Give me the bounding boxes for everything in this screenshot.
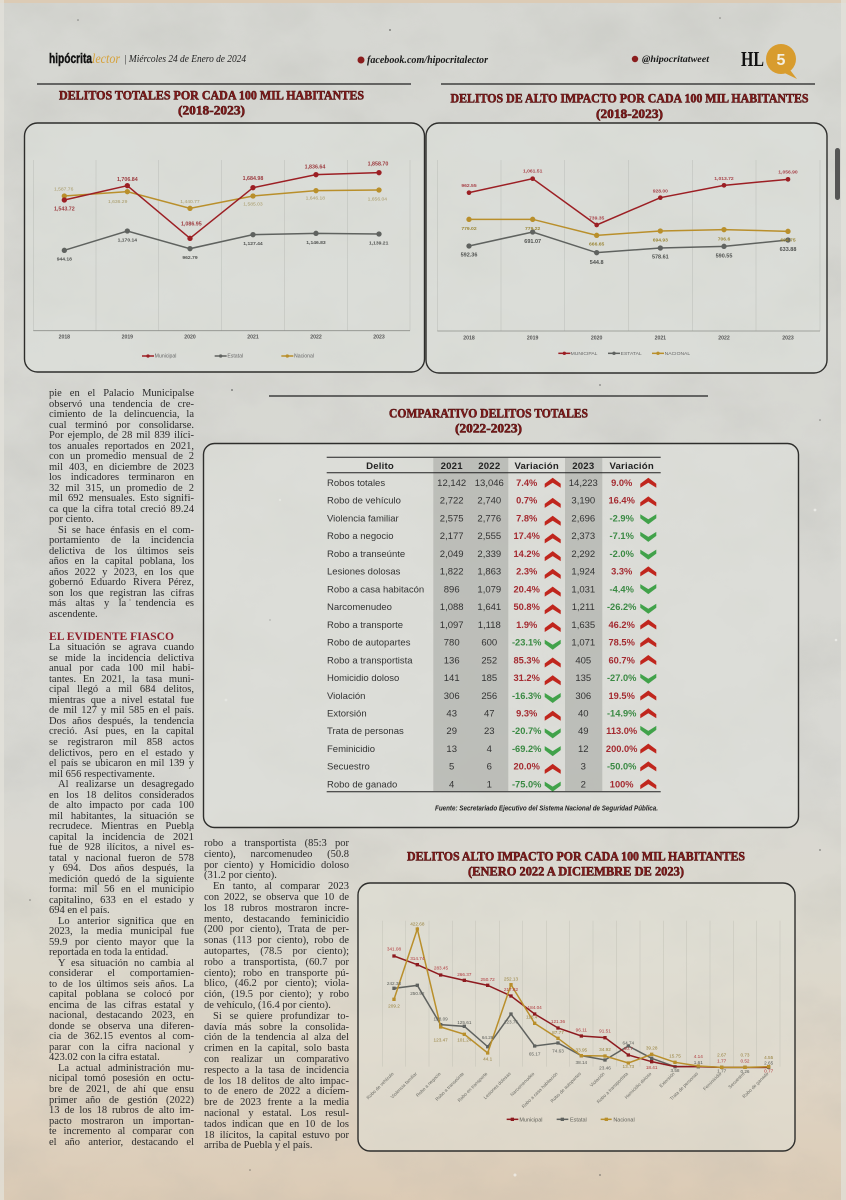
data labels: 1,706.84 <box>117 177 138 183</box>
table rows: 7.4% <box>516 478 538 488</box>
table rows: Robo de autopartes <box>327 638 411 649</box>
data labels: nacional: 209.2 <box>388 1003 400 1008</box>
text column 2 <box>204 839 349 1151</box>
data labels: nacional: 33.95 <box>576 1048 588 1053</box>
year axis: 2018 <box>463 336 475 342</box>
data labels: nacional: 118.4 <box>526 1014 538 1019</box>
legend: Nacional <box>294 354 314 360</box>
table rows: 13,046 <box>475 478 504 489</box>
data labels <box>461 169 798 221</box>
data labels: municipal: 91.51 <box>599 1029 611 1034</box>
table rows: Feminicidio <box>327 744 375 755</box>
panel: line chart delitos de alto impacto: 544.8 <box>590 260 604 266</box>
data labels: municipal: 0.77 <box>764 1068 774 1073</box>
data labels: nacional: 34.92 <box>599 1047 611 1052</box>
table rows: 9.3% <box>516 709 538 719</box>
data labels <box>54 162 388 227</box>
category axis labels: Secuestro <box>727 1071 746 1090</box>
table rows: 23 <box>484 726 495 737</box>
title: delitos de alto impacto: (2018-2023) <box>596 107 663 121</box>
data labels: nacional: 87.77 <box>552 1030 564 1035</box>
year axis <box>59 335 385 341</box>
legend: Estatal <box>227 354 243 360</box>
panel: line chart delitos de alto impacto: 779.22 <box>525 226 541 232</box>
scrollbar mark <box>835 148 840 200</box>
table rows: 12,142 <box>437 478 466 489</box>
table rows: 9.0% <box>611 478 633 488</box>
table rows: 2,696 <box>571 514 595 525</box>
panel: line chart delitos de alto impacto: 691.07 <box>524 239 541 245</box>
data labels: 1,684.98 <box>243 176 263 182</box>
table rows: 2,373 <box>571 531 595 542</box>
table rows: Robo de vehículo <box>327 496 401 507</box>
data labels: municipal: 217.82 <box>504 987 519 992</box>
series: municipal <box>467 176 790 227</box>
table rows: 2,722 <box>440 496 464 507</box>
data labels: estatal: 0.26 <box>740 1069 750 1074</box>
panel: line chart delitos de alto impacto: 664.75 <box>780 238 796 244</box>
series: estatal <box>62 228 382 253</box>
title: comparativo delitos totales: COMPARATIVO DELITOS TOTALES <box>389 406 588 420</box>
table rows: -75.0% <box>512 779 542 789</box>
data labels: 1,061.51 <box>523 169 543 175</box>
table rows: 306 <box>444 691 460 702</box>
title: comparativo delitos totales: (2022-2023) <box>455 422 522 436</box>
table rows: Violación <box>327 691 365 702</box>
table rows: 1,079 <box>477 584 501 595</box>
table rows: Robo a negocio <box>327 531 394 542</box>
legend <box>558 351 690 357</box>
table rows <box>327 478 656 792</box>
HL page badge: HL <box>741 47 764 71</box>
title: delitos totales: DELITOS TOTALES POR CADA 100 MIL HABITANTES <box>59 88 364 102</box>
panel: line chart delitos de alto impacto: 779.02 <box>461 226 477 232</box>
category axis labels: Robo en transporte <box>457 1071 489 1103</box>
table rows: 17.4% <box>514 531 541 541</box>
panel: line chart delitos totales: 1,646.18 <box>306 196 325 202</box>
table header: 2021 <box>441 461 463 472</box>
series: estatal <box>466 229 791 255</box>
table header <box>327 457 661 473</box>
table rows: 60.7% <box>609 655 636 665</box>
table rows: 141 <box>444 673 460 684</box>
data labels: municipal: 283.45 <box>434 966 449 971</box>
panel: line chart delitos totales: 1,146.83 <box>306 240 326 246</box>
table rows: 4 <box>449 779 454 790</box>
table rows: Secuestro <box>327 762 370 773</box>
table rows: -2.9% <box>610 514 635 524</box>
panel: line chart delitos de alto impacto: 694.93 <box>653 238 668 244</box>
data labels: 962.55 <box>461 183 477 189</box>
table rows: 31.2% <box>514 673 541 683</box>
data labels: 1,056.90 <box>778 169 798 175</box>
table rows: Violencia familiar <box>327 514 399 525</box>
panel: line chart delitos totales: 1,170.14 <box>118 238 137 244</box>
year axis: 2020 <box>184 335 196 341</box>
table rows: -50.0% <box>607 762 637 772</box>
table rows: -26.2% <box>607 602 637 612</box>
panel: line chart alto impacto por delito <box>358 883 795 1151</box>
title: delitos de alto impacto: DELITOS DE ALTO IMPACTO POR CADA 100 MIL HABITANTES <box>450 92 809 106</box>
table rows: 780 <box>444 638 460 649</box>
table rows: 50.8% <box>514 602 541 612</box>
twitter handle: @hipocritatweet <box>642 55 709 65</box>
year axis: 2021 <box>247 335 259 341</box>
series: estatal <box>392 984 770 1069</box>
data labels: nacional: 101.24 <box>457 1038 472 1043</box>
table rows: 2,776 <box>477 514 501 525</box>
table header: 2022 <box>478 461 500 472</box>
data labels: nacional: 4.55 <box>764 1055 774 1060</box>
panel: line chart delitos totales: 1,139.21 <box>369 240 389 246</box>
panel: line chart delitos de alto impacto <box>426 123 827 373</box>
series: municipal <box>392 954 769 1067</box>
table rows: -4.4% <box>610 584 635 594</box>
table rows: 1,641 <box>477 602 501 613</box>
logo: hipócrita lector: hipócrita <box>49 50 92 66</box>
table rows: 136 <box>444 655 460 666</box>
table rows: 6 <box>487 762 492 773</box>
data labels: 928.00 <box>653 188 668 194</box>
table rows: -69.2% <box>512 744 542 754</box>
panel: line chart delitos totales: 1,440.77 <box>180 199 200 205</box>
data labels: nacional: 15.75 <box>669 1053 681 1058</box>
table rows: 1,097 <box>440 620 464 631</box>
table rows: 185 <box>481 673 497 684</box>
table rows: 29 <box>446 726 457 737</box>
panel: line chart delitos totales: 1,587.76 <box>54 187 74 193</box>
table header: Variación <box>609 461 654 472</box>
data labels: estatal: 1.77 <box>717 1068 727 1073</box>
category axis labels: Robo de ganado <box>741 1071 770 1099</box>
category axis labels: Robo a transeúnte <box>434 1071 465 1102</box>
legend <box>507 1117 635 1123</box>
table rows: 40 <box>578 709 589 720</box>
HL page badge <box>741 44 797 79</box>
date: | Miércoles 24 de Enero de 2024 <box>124 54 247 65</box>
table rows: 1.9% <box>516 620 538 630</box>
table rows: Lesiones dolosas <box>327 567 401 578</box>
data labels: nacional: 39.28 <box>646 1046 658 1051</box>
table rows: 2 <box>581 779 586 790</box>
data labels: municipal: 60.7 <box>624 1046 633 1051</box>
table rows: -20.7% <box>512 726 542 736</box>
panel: line chart delitos de alto impacto: 578.61 <box>652 255 669 261</box>
data labels: estatal <box>387 981 774 1074</box>
table rows: 600 <box>481 638 497 649</box>
source note: Fuente: Secretariado Ejecutivo del Sistema Nacional de Seguridad Pública. <box>435 806 658 812</box>
table rows: 306 <box>575 691 591 702</box>
data labels: municipal: 121.36 <box>551 1019 566 1024</box>
data labels: nacional: 0.73 <box>740 1053 750 1058</box>
data labels: estatal: 23.46 <box>599 1065 611 1070</box>
panel: line chart delitos de alto impacto: 706.6 <box>718 236 730 242</box>
text column 1 <box>49 389 194 1148</box>
data labels: municipal: 1.77 <box>717 1058 727 1063</box>
table rows: -2.0% <box>610 549 635 559</box>
legend: MUNICIPAL <box>571 351 598 357</box>
data labels: 1,858.70 <box>368 162 388 168</box>
table rows: 4 <box>487 744 492 755</box>
panel: line chart delitos de alto impacto: 633.88 <box>780 247 796 253</box>
table rows: Robos totales <box>327 478 385 489</box>
table rows: 1,088 <box>440 602 464 613</box>
table rows: 896 <box>444 584 460 595</box>
table rows: -27.0% <box>607 673 637 683</box>
data labels: municipal: 314.74 <box>410 956 425 961</box>
panel: line chart delitos totales: 1,636.29 <box>108 199 128 205</box>
data labels: nacional: 422.68 <box>410 922 425 927</box>
category axis labels: Violación <box>589 1071 606 1088</box>
table header: Delito <box>366 461 394 472</box>
panel: line chart delitos de alto impacto: 590.55 <box>716 253 732 259</box>
table rows: 3.3% <box>611 567 633 577</box>
table rows: 1,863 <box>477 567 501 578</box>
data labels: estatal: 1.61 <box>694 1060 703 1065</box>
data labels: municipal: 4.14 <box>694 1054 703 1059</box>
year axis: 2022 <box>310 335 322 341</box>
table rows: -23.1% <box>512 638 542 648</box>
table rows: 2,555 <box>477 531 501 542</box>
year axis: 2022 <box>718 336 730 342</box>
data labels: estatal: 64.28 <box>482 1035 494 1040</box>
data labels: estatal: 74.63 <box>552 1048 564 1053</box>
data labels: nacional: 13.73 <box>623 1064 635 1069</box>
panel: tabla comparativa <box>204 444 798 828</box>
title: delitos alto impacto 2022-2023: DELITOS ALTO IMPACTO POR CADA 100 MIL HABITANTES <box>407 850 745 864</box>
table rows: 1,071 <box>571 638 595 649</box>
panel: line chart delitos totales <box>24 123 424 372</box>
legend: Municipal <box>519 1117 543 1123</box>
year axis: 2023 <box>373 335 385 341</box>
category axis labels: Robo a transportista <box>596 1071 629 1104</box>
data labels: municipal: 341.08 <box>387 947 402 952</box>
panel: line chart delitos totales: 944.18 <box>57 257 72 263</box>
table rows: 1,211 <box>572 602 595 613</box>
data labels: estatal: 64.74 <box>623 1040 635 1045</box>
year axis: 2019 <box>122 335 133 341</box>
table rows: Homicidio doloso <box>327 673 399 684</box>
table rows: Narcomenudeo <box>327 602 392 613</box>
series: municipal <box>62 170 382 241</box>
table rows: -14.9% <box>607 709 637 719</box>
table rows: 256 <box>481 691 497 702</box>
legend <box>142 354 314 360</box>
table rows: 2,575 <box>440 514 464 525</box>
data labels: nacional: 44.1 <box>483 1057 493 1062</box>
table rows: 5 <box>449 762 454 773</box>
data labels: nacional: 252.13 <box>504 976 519 981</box>
table rows: 2,292 <box>571 549 595 560</box>
table rows: 49 <box>578 726 589 737</box>
data labels: nacional <box>388 922 774 1069</box>
category axis labels: Robo a casa habitación <box>521 1071 559 1109</box>
data labels: estatal: 2.65 <box>764 1060 774 1065</box>
table rows: 78.5% <box>609 638 636 648</box>
legend: Estatal <box>570 1117 587 1123</box>
table rows: 85.3% <box>514 655 541 665</box>
year axis <box>463 336 794 342</box>
table rows: 20.4% <box>514 584 541 594</box>
data labels: estatal: 125.61 <box>457 1020 472 1025</box>
category axis labels: Robo de autopartes <box>550 1071 583 1104</box>
data labels: 1,013.72 <box>714 176 734 182</box>
data labels: estatal: 250.92 <box>410 991 425 996</box>
shaded year columns <box>433 458 602 791</box>
year axis: 2021 <box>655 336 666 342</box>
legend: Municipal <box>155 354 176 360</box>
table rows: -7.1% <box>610 531 635 541</box>
panel: line chart delitos totales: 1,656.04 <box>368 196 387 202</box>
table rows: 14.2% <box>514 549 541 559</box>
title: delitos totales <box>37 84 411 118</box>
title: delitos totales: (2018-2023) <box>178 104 245 118</box>
series: nacional <box>392 927 770 1069</box>
data labels: estatal: 242.38 <box>387 981 402 986</box>
HL page badge: 5 <box>777 52 786 69</box>
title: delitos alto impacto 2022-2023: (ENERO 2022 A DICIEMBRE DE 2023) <box>468 864 684 878</box>
table rows: 1,924 <box>571 567 595 578</box>
table rows: 100% <box>610 779 634 789</box>
category axis labels: Lesiones dolosas <box>483 1071 512 1100</box>
facebook handle: facebook.com/hipocritalector <box>367 55 489 66</box>
data labels: estatal: 3.58 <box>670 1068 680 1073</box>
data labels: estatal: 128.09 <box>434 1017 448 1022</box>
table rows: 113.0% <box>606 726 638 736</box>
table rows: 252 <box>481 655 497 666</box>
legend: NACIONAL <box>665 351 690 357</box>
table rows: 2,339 <box>477 549 501 560</box>
legend: Nacional <box>613 1117 635 1123</box>
data labels: municipal: 0.52 <box>740 1058 750 1063</box>
table rows: 20.0% <box>514 762 541 772</box>
category axis labels <box>366 1071 770 1109</box>
category axis labels: Homicidio doloso <box>624 1071 653 1100</box>
table rows: 1,031 <box>571 584 595 595</box>
table rows: 405 <box>575 655 591 666</box>
data labels: 1,836.64 <box>305 165 325 171</box>
data labels: municipal: 250.72 <box>481 977 495 982</box>
logo: hipócrita lector: lector <box>92 52 120 67</box>
panel: line chart delitos totales: 962.79 <box>182 255 198 261</box>
panel: line chart delitos de alto impacto: 592.36 <box>461 253 477 259</box>
panel: line chart delitos totales: 1,585.03 <box>243 201 263 207</box>
table header: 2023 <box>572 461 594 472</box>
year axis: 2023 <box>782 336 794 342</box>
table rows: Robo de ganado <box>327 779 397 790</box>
table rows: Robo a transportista <box>327 655 413 666</box>
table rows: 47 <box>484 709 495 720</box>
table rows: Robo a casa habitacón <box>327 584 424 595</box>
table header: Variación <box>514 461 559 472</box>
table rows: 1,635 <box>571 620 595 631</box>
data labels: 1,086.95 <box>181 221 202 227</box>
table rows: 1,118 <box>478 620 501 631</box>
title: delitos de alto impacto <box>441 84 815 121</box>
table rows: 7.8% <box>516 514 538 524</box>
year axis: 2020 <box>591 336 603 342</box>
table rows: 3 <box>581 762 586 773</box>
title: delitos alto impacto 2022-2023 <box>407 850 745 878</box>
data labels: municipal <box>387 947 774 1073</box>
category axis labels: Robo de vehículo <box>366 1071 395 1100</box>
table rows: 0.7% <box>516 496 538 506</box>
category axis labels: Feminicidio <box>702 1071 723 1091</box>
table rows: 2,740 <box>477 496 501 507</box>
table rows: 46.2% <box>609 620 636 630</box>
data labels: municipal: 96.11 <box>576 1028 587 1033</box>
data labels: nacional: 2.67 <box>717 1053 727 1058</box>
table rows: 19.5% <box>609 691 636 701</box>
table rows: 135 <box>575 673 591 684</box>
table rows: 2,177 <box>440 531 464 542</box>
data labels: 1,543.72 <box>54 206 75 212</box>
table rows: Trata de personas <box>327 726 404 737</box>
series: nacional <box>466 217 791 238</box>
masthead <box>49 44 797 79</box>
category axis labels: Trata de personas <box>669 1071 700 1101</box>
table rows: -16.3% <box>512 691 542 701</box>
panel: line chart delitos totales: 1,127.44 <box>243 241 263 247</box>
table rows: 12 <box>578 744 589 755</box>
legend: ESTATAL <box>621 351 642 357</box>
table rows: Robo a transeúnte <box>327 549 405 560</box>
table rows: 200.0% <box>606 744 638 754</box>
data labels: municipal: 184.04 <box>528 1005 542 1010</box>
data labels: municipal: 266.37 <box>457 972 472 977</box>
table rows: 1,822 <box>440 567 464 578</box>
table rows: 14,223 <box>569 478 598 489</box>
table rows: Robo a transporte <box>327 620 403 631</box>
table rows: 3,190 <box>571 496 595 507</box>
year axis: 2018 <box>59 335 70 341</box>
data labels: estatal: 65.17 <box>529 1051 541 1056</box>
category axis labels: Robo a negocio <box>415 1071 442 1098</box>
table rows: 2,049 <box>440 549 464 560</box>
table rows: 16.4% <box>609 496 636 506</box>
table rows: 43 <box>446 709 457 720</box>
table rows: 13 <box>446 744 457 755</box>
data labels: 739.35 <box>589 215 605 221</box>
series: nacional <box>62 187 382 211</box>
data labels: estatal: 123.76 <box>504 1019 519 1024</box>
category axis labels: Violencia familiar <box>390 1071 418 1100</box>
panel: line chart delitos de alto impacto: 666.65 <box>589 242 605 248</box>
title: comparativo delitos totales <box>269 396 708 436</box>
category axis labels: Narcomenudeo <box>509 1071 536 1097</box>
data labels: municipal: 18.41 <box>646 1065 658 1070</box>
data labels: estatal: 38.14 <box>576 1060 588 1065</box>
table rows: 2.3% <box>516 567 538 577</box>
table rows: Extorsión <box>327 709 367 720</box>
year axis: 2019 <box>527 336 539 342</box>
data labels: nacional: 123.47 <box>434 1037 448 1042</box>
table rows: 1 <box>487 779 492 790</box>
category axis labels: Extorsión <box>658 1071 676 1088</box>
